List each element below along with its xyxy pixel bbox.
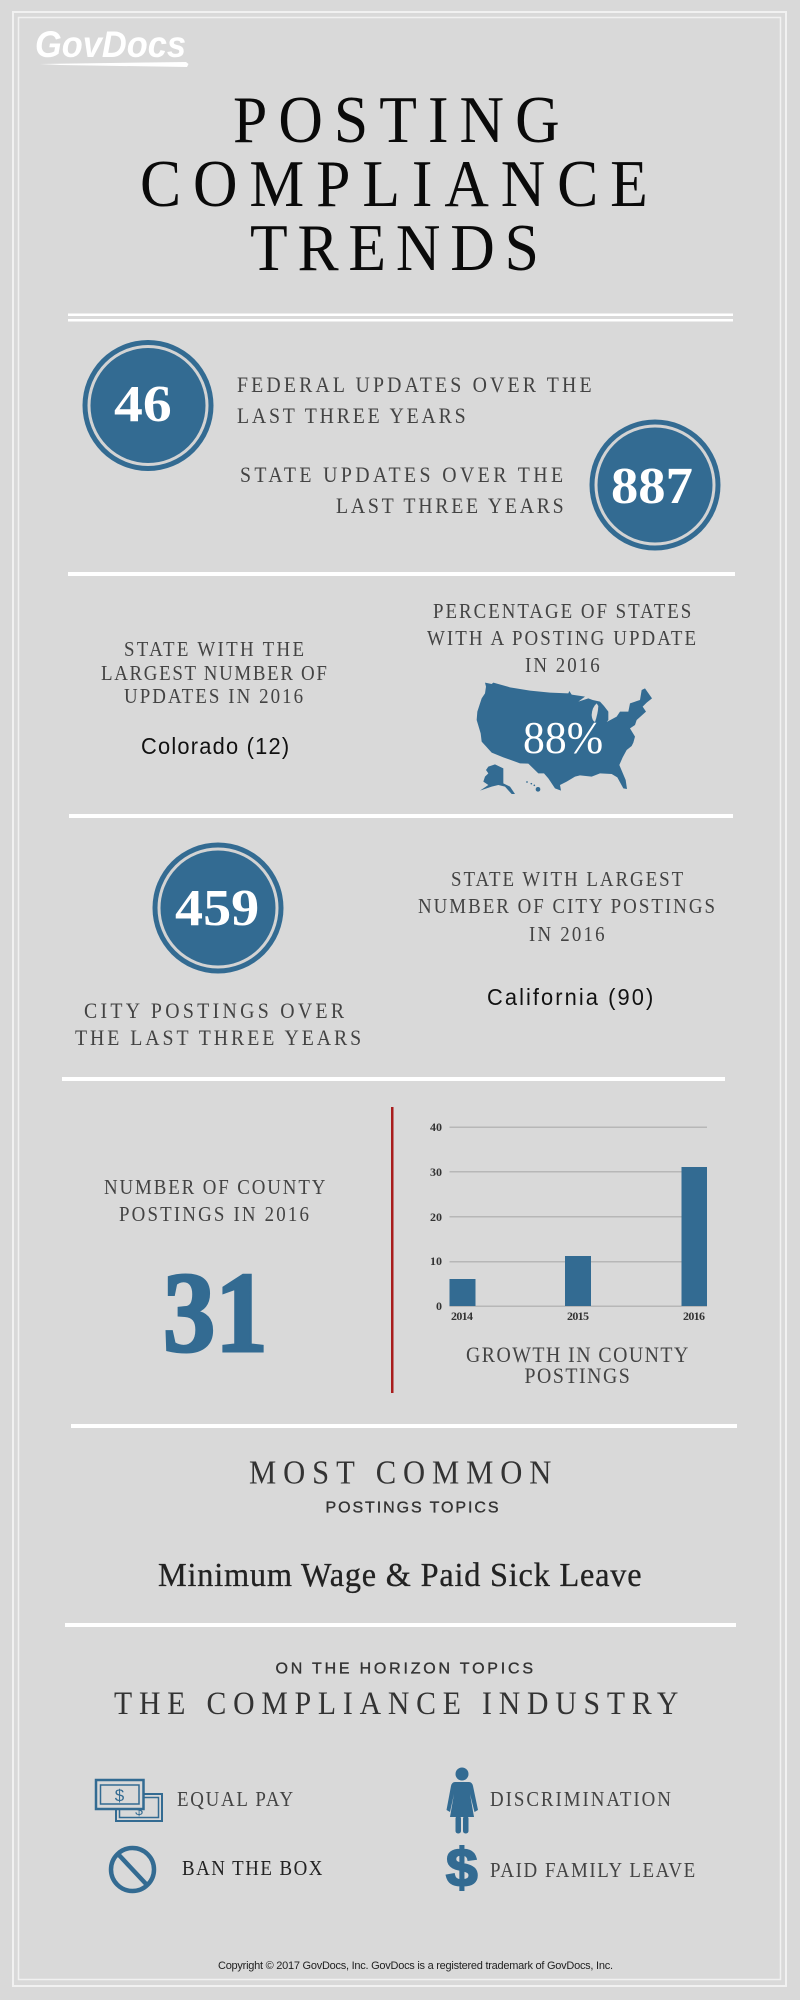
title: POSTING	[233, 83, 560, 157]
text: percentage of states: IN 2016	[525, 654, 600, 677]
bar: 2014	[450, 1279, 476, 1306]
text: number of county postings: POSTINGS IN 2016	[119, 1203, 309, 1226]
heading: most common: MOST COMMON	[249, 1453, 551, 1491]
icon: woman	[446, 1768, 478, 1834]
icon: money bills	[96, 1780, 162, 1821]
title: COMPLIANCE	[140, 147, 648, 221]
text: state updates: LAST THREE YEARS	[336, 493, 564, 518]
subheading: on the horizon topics: ON THE HORIZON TOPICS	[276, 1660, 533, 1678]
bar chart: growth in county postings: 2015	[567, 1309, 589, 1323]
chart caption: growth in county postings	[466, 1342, 688, 1388]
text: percentage of states: WITH A POSTING UPDATE	[427, 627, 696, 650]
title	[140, 83, 648, 285]
big number: 31: 31	[163, 1248, 268, 1376]
text: state with the largest number of updates: STATE WITH THE	[124, 638, 304, 661]
copyright footer: Copyright © 2017 GovDocs, Inc. GovDocs is a registered trademark of GovDocs, Inc.	[218, 1960, 613, 1972]
text: federal updates: LAST THREE YEARS	[237, 403, 466, 428]
bar chart: growth in county postings: 0	[436, 1299, 442, 1313]
text: city postings over the last three years	[75, 998, 361, 1050]
label: paid family leave: PAID FAMILY LEAVE	[490, 1859, 695, 1882]
bar: 2015	[565, 1256, 591, 1306]
text: state with the largest number of updates	[101, 638, 327, 708]
map: United States with 88%	[477, 683, 652, 794]
stat circle: 459 city postings	[152, 842, 284, 974]
bar chart: growth in county postings: 2016	[683, 1309, 705, 1323]
bar chart: growth in county postings: 20	[430, 1210, 442, 1224]
bar chart: growth in county postings	[430, 1120, 707, 1323]
title: TRENDS	[250, 211, 539, 285]
icon: prohibited sign	[111, 1848, 154, 1891]
panel: city postings	[75, 842, 715, 1050]
text: state with the largest number of updates: LARGEST NUMBER OF	[101, 662, 327, 685]
text: state with largest number of city postings	[418, 868, 715, 946]
text: state with largest number of city postings: NUMBER OF CITY POSTINGS	[418, 895, 715, 918]
text: minimum wage and paid sick leave: Minimum Wage & Paid Sick Leave	[158, 1556, 642, 1594]
stat circle: 887 state updates	[590, 420, 720, 550]
bar chart: growth in county postings: 30	[430, 1165, 442, 1179]
subheading: postings topics: POSTINGS TOPICS	[326, 1500, 498, 1516]
text: state with largest number of city postings: STATE WITH LARGEST	[451, 868, 683, 891]
bar: 2016	[682, 1167, 707, 1306]
icon: dollar sign: $	[446, 1837, 478, 1898]
label: discrimination: DISCRIMINATION	[490, 1788, 671, 1811]
icon: money bills: $	[115, 1786, 125, 1805]
stat circle: 887 state updates: 887	[611, 456, 693, 515]
chart caption: growth in county postings: POSTINGS	[524, 1363, 630, 1388]
bar chart: growth in county postings: 2014	[451, 1309, 473, 1323]
panel: state updates in 2016	[101, 600, 696, 794]
stat circle: 46 federal updates	[82, 340, 214, 471]
bar chart: growth in county postings: 10	[430, 1254, 442, 1268]
stat circle: 459 city postings: 459	[175, 879, 259, 937]
text: federal updates: FEDERAL UPDATES OVER THE	[237, 372, 592, 397]
value: California (90): California (90)	[487, 984, 653, 1010]
text: percentage of states: PERCENTAGE OF STATES	[433, 600, 691, 623]
text: state with largest number of city postings: IN 2016	[529, 923, 605, 946]
text: city postings over the last three years: THE LAST THREE YEARS	[75, 1025, 361, 1050]
stat circle: 46 federal updates: 46	[114, 375, 172, 432]
value: Colorado (12): Colorado (12)	[141, 733, 289, 759]
text: number of county postings: NUMBER OF COUNTY	[104, 1176, 325, 1199]
heading: the compliance industry: THE COMPLIANCE INDUSTRY	[114, 1685, 678, 1721]
text: city postings over the last three years: CITY POSTINGS OVER	[84, 998, 344, 1023]
panel: on the horizon topics	[96, 1660, 695, 1898]
panel: federal and state updates	[82, 340, 720, 550]
panel: most common topics	[158, 1453, 642, 1594]
text: federal updates	[237, 372, 592, 428]
panel: county postings	[104, 1107, 707, 1393]
text: state with the largest number of updates: UPDATES IN 2016	[124, 685, 303, 708]
chart caption: growth in county postings: GROWTH IN COUNTY	[466, 1342, 688, 1367]
text: number of county postings	[104, 1176, 325, 1226]
bar chart: growth in county postings: 40	[430, 1120, 442, 1134]
text: state updates: STATE UPDATES OVER THE	[240, 462, 563, 487]
logo: GovDocs: GovDocs	[35, 24, 186, 65]
label: ban the box: BAN THE BOX	[182, 1857, 323, 1880]
icon: money bills: $	[135, 1802, 143, 1818]
label: equal pay: EQUAL PAY	[177, 1788, 293, 1811]
map: United States with 88%: 88%	[523, 712, 603, 763]
text: percentage of states	[427, 600, 696, 677]
text: state updates	[240, 462, 564, 518]
